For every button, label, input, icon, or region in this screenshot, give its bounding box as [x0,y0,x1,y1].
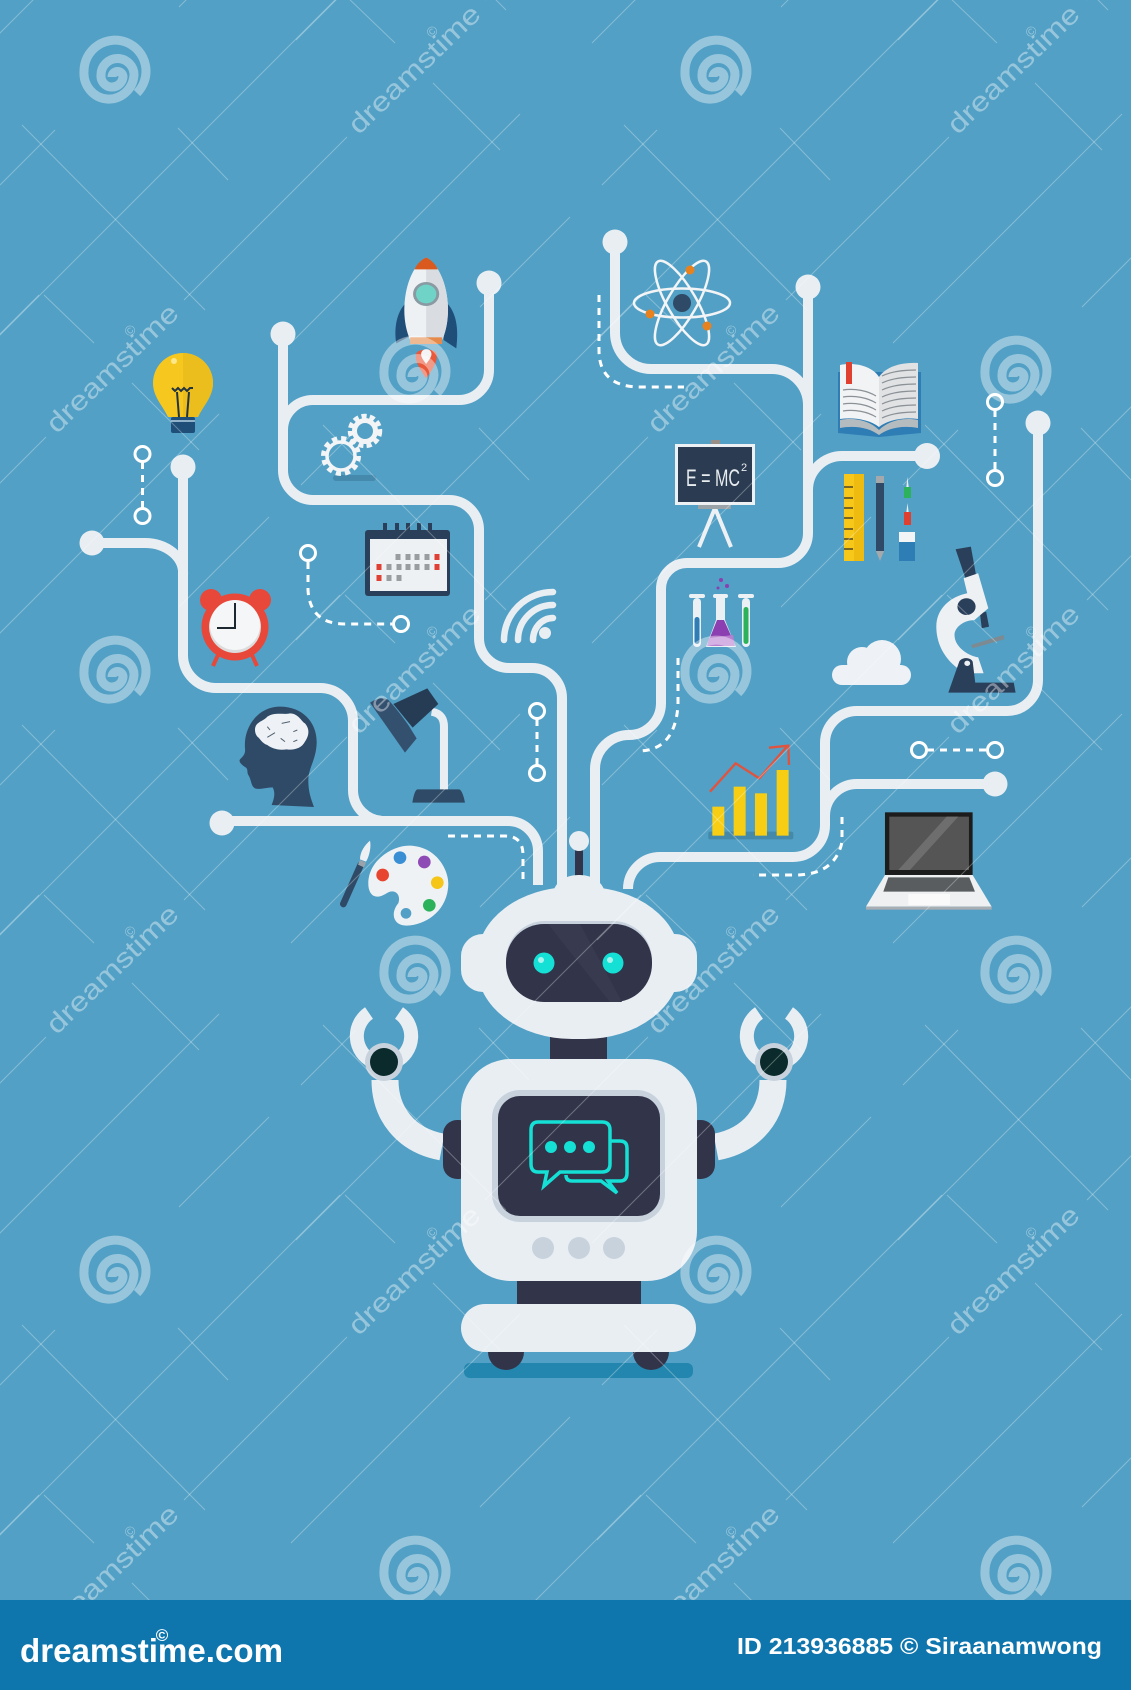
footer logo text: dreamstime.com [20,1632,283,1669]
watermark spirals [84,40,1047,1599]
icon: paint palette and brush [343,841,448,926]
robot wheels [488,1334,669,1370]
watermark text: dreamstime [342,599,487,740]
watermark text: © [423,622,442,641]
icon: open book [838,362,921,437]
icon: alarm clock [200,589,271,666]
icon: test tubes and flask [689,578,754,647]
watermark text: dreamstime [941,599,1086,740]
watermark text: © [423,22,442,41]
icon: blackboard with formula: E = MC [686,465,740,492]
footer image id: ID 213936885 © Siraanamwong [737,1633,1102,1659]
icon: blackboard with formula: 2 [741,462,747,474]
icon: microscope [936,547,1016,693]
watermark text: © [1022,22,1041,41]
watermark text: dreamstime [641,899,786,1040]
chat bubbles icon [531,1122,627,1193]
icon: atom [634,254,730,352]
robot neck and waist [517,1037,641,1306]
watermark text: © [722,321,741,340]
watermark text: © [423,1223,442,1242]
robot [357,831,801,1378]
watermark text: dreamstime [342,1200,487,1341]
robot left arm [357,1013,442,1147]
icon: calendar [365,523,450,596]
icon: gears [324,416,380,481]
watermark text: dreamstime [641,298,786,439]
watermark text: © [121,1522,140,1541]
watermark text: dreamstime [941,1200,1086,1341]
watermark text: dreamstime [941,0,1086,140]
watermark text: © [1022,1223,1041,1242]
watermark text: dreamstime [40,298,185,439]
robot ground shadow [464,1363,693,1378]
robot base [461,1304,696,1352]
icon: bar chart with arrow [708,746,793,839]
icon: human head with brain [240,707,317,807]
icon: blackboard with formula [675,440,755,547]
watermark text: © [1022,622,1041,641]
circuit wires [80,230,1050,889]
footer band [0,1600,1131,1690]
icon: rocket [395,257,457,378]
robot head [461,875,697,1039]
watermark text: © [722,922,741,941]
footer logo text: © [156,1626,169,1645]
robot shoulders [443,1120,715,1179]
robot body [461,1059,697,1281]
icon: desk lamp [370,688,465,803]
watermark text: dreamstime [641,1499,786,1640]
watermark text: © [121,922,140,941]
watermark text: dreamstime [40,1499,185,1640]
watermark text: dreamstime [342,0,487,140]
icon: wifi [504,592,553,640]
icon: laptop [866,812,992,910]
watermark text: © [121,321,140,340]
robot right arm [716,1013,801,1147]
robot antenna [569,831,589,878]
watermark text: dreamstime [40,899,185,1040]
watermark text: © [722,1522,741,1541]
icon: ruler, pencil, pins, bottle [844,474,915,561]
icon: cloud [832,640,911,685]
icon: light bulb [153,353,213,433]
dashed connectors [135,295,1002,885]
